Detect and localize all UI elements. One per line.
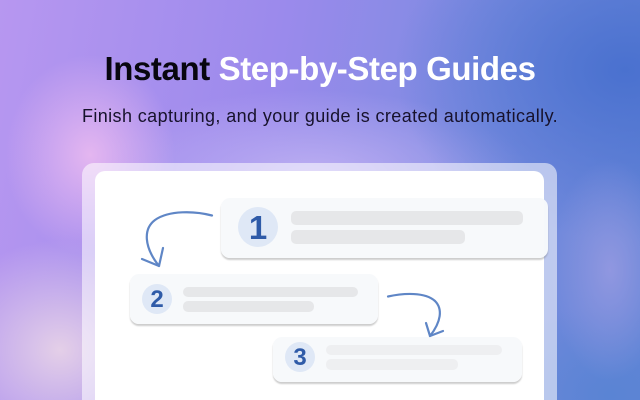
step 1 text placeholder line 2	[291, 230, 465, 244]
title: Instant Step-by-Step Guides	[104, 50, 536, 87]
card: step 2	[130, 274, 378, 324]
step 3 text placeholder line 1	[326, 345, 502, 355]
step 2 text placeholder line 2	[183, 301, 314, 312]
step 1 text placeholder line 1	[291, 211, 523, 225]
step number 3: 3	[293, 344, 307, 371]
step number 2: 2	[150, 286, 164, 313]
panel: inner white sheet	[95, 171, 544, 400]
panel: outer translucent frame	[82, 163, 557, 400]
arrow: step 2 to step 3	[388, 294, 443, 336]
card: step 3	[273, 337, 522, 382]
step 3 text placeholder line 2	[326, 359, 458, 370]
step number 1	[238, 207, 278, 247]
step number 2	[142, 284, 172, 314]
subtitle: Finish capturing, and your guide is created automatically.	[82, 106, 558, 126]
card: step 1	[221, 198, 548, 258]
step number 3	[285, 342, 315, 372]
step number 1: 1	[249, 209, 267, 246]
step 2 text placeholder line 1	[183, 287, 358, 297]
arrow: step 1 to step 2	[142, 212, 212, 266]
